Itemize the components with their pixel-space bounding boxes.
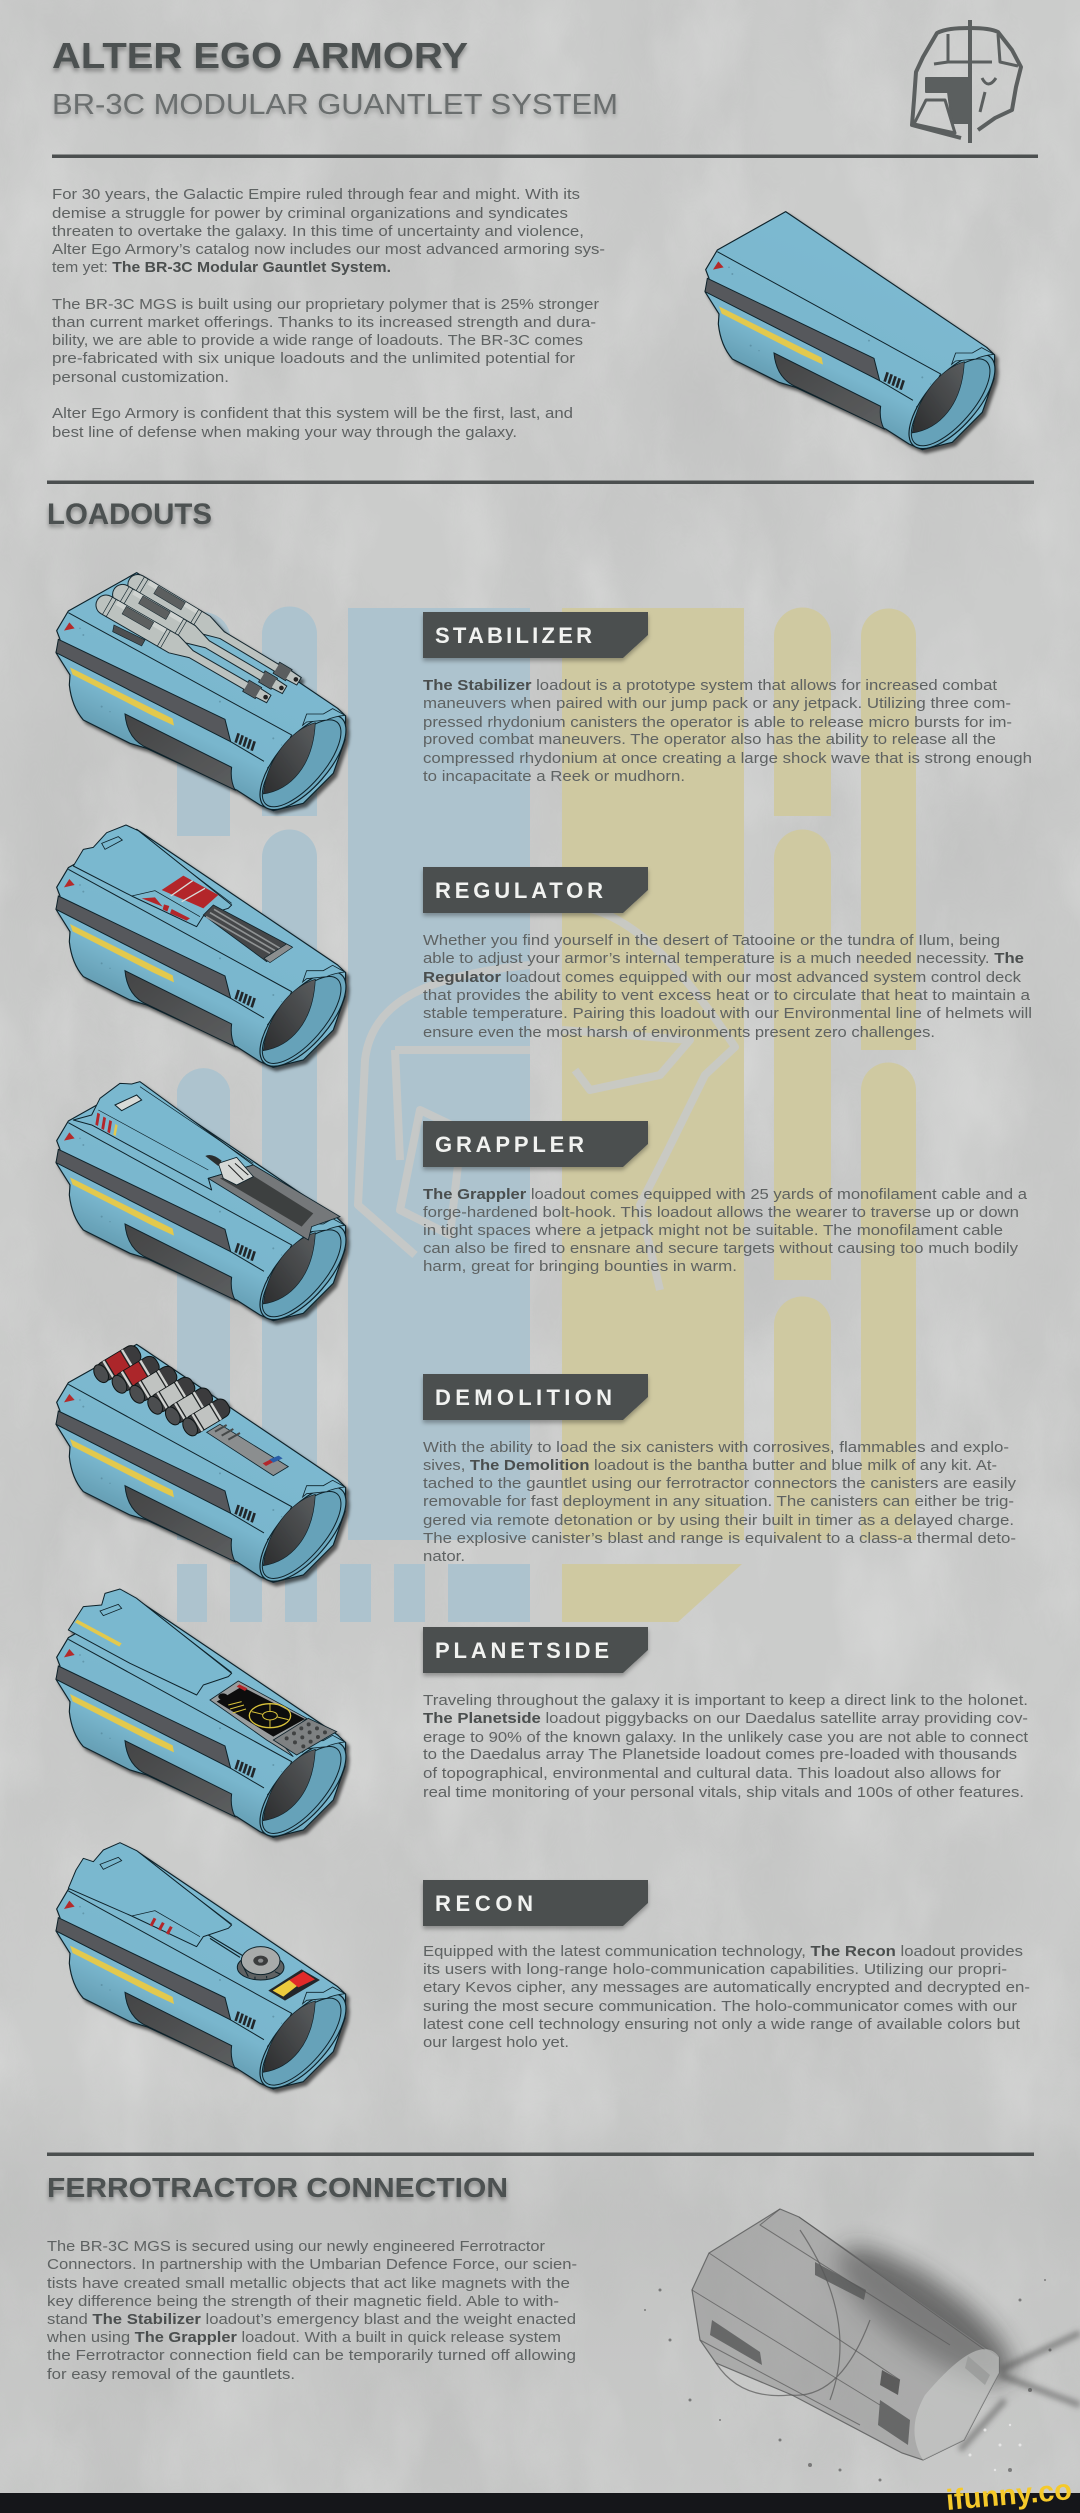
gauntlet: stabilizer with three canisters (56, 571, 361, 823)
label: planetside: PLANETSIDE (435, 1638, 609, 1663)
gauntlet: demolition with six canisters (56, 1343, 361, 1595)
text: regulator (423, 932, 1032, 1041)
label: grappler (423, 1121, 648, 1167)
title: ALTER EGO ARMORY (52, 35, 468, 76)
text: regulator: able to adjust your armor’s internal temperature is a much needed necessity. The (423, 950, 1024, 967)
text: grappler: forge-hardened bolt-hook. This loadout allows the wearer to traverse up or down (423, 1204, 1019, 1221)
intro text block: Alter Ego Armory’s catalog now includes our most advanced armoring sys- (52, 241, 605, 258)
text: stabilizer: pressed rhydonium canisters the operator is able to release micro bursts for im- (423, 714, 1012, 731)
text: regulator: ensure even the most harsh of environments present zero challenges. (423, 1024, 935, 1041)
intro text block: For 30 years, the Galactic Empire ruled through fear and might. With its (52, 186, 580, 203)
intro text block: demise a struggle for power by criminal organizations and syndicates (52, 205, 568, 222)
text: regulator: Whether you find yourself in the desert of Tatooine or the tundra of Ilum, being (423, 932, 1000, 949)
subtitle: BR-3C MODULAR GUANTLET SYSTEM (52, 89, 618, 121)
text: recon: Equipped with the latest communication technology, The Recon loadout provides (423, 1943, 1023, 1960)
heading: loadouts: LOADOUTS (47, 498, 212, 531)
panel: regulator (56, 825, 1032, 1080)
panel: stabilizer (56, 571, 1032, 823)
label: regulator: REGULATOR (435, 878, 603, 903)
icon: split helmet logo (912, 20, 1021, 143)
text: grappler: The Grappler loadout comes equipped with 25 yards of monofilament cable and a (423, 1186, 1028, 1203)
label: demolition (423, 1374, 648, 1420)
text: planetside: real time monitoring of your personal vitals, ship vitals and 100s of other features. (423, 1784, 1024, 1801)
header divider (52, 154, 1038, 158)
label: recon: RECON (435, 1891, 533, 1916)
intro text block: Alter Ego Armory is confident that this system will be the first, last, and (52, 405, 573, 422)
intro text block: than current market offerings. Thanks to its increased strength and dura- (52, 314, 596, 331)
watermark: split helmet of blue and yellow bars (177, 606, 916, 1622)
text: ferrotractor (46, 2238, 577, 2383)
text: demolition (423, 1439, 1017, 1565)
gauntlet: planetside with data screen (56, 1589, 361, 1850)
intro text block (52, 186, 605, 441)
text: ferrotractor: Connectors. In partnership with the Umbarian Defence Force, our scien- (47, 2256, 577, 2273)
gauntlet: regulator with control deck (56, 825, 361, 1080)
label: demolition: DEMOLITION (435, 1385, 612, 1410)
text: recon: its users with long-range holo-communication capabilities. Utilizing our propri- (423, 1961, 1007, 1978)
label: stabilizer (423, 612, 648, 658)
text: grappler (423, 1186, 1028, 1275)
text: planetside: to the Daedalus array The Planetside loadout comes pre-loaded with thousands (423, 1746, 1017, 1763)
intro text block: bility, we are able to provide a wide range of loadouts. The BR-3C comes (52, 332, 583, 349)
text: regulator: Regulator loadout comes equipped with our most advanced system control deck (423, 969, 1022, 986)
text: demolition: sives, The Demolition loadout is the bantha butter and blue milk of any kit. At- (423, 1457, 997, 1474)
gauntlet: recon with holo-communicator (56, 1843, 361, 2102)
text: ferrotractor: The BR-3C MGS is secured using our newly engineered Ferrotractor (47, 2238, 545, 2255)
text: demolition: nator. (423, 1548, 465, 1565)
text: planetside: erage to 90% of the known galaxy. In the unlikely case you are not able to connect (423, 1729, 1029, 1746)
text: stabilizer: proved combat maneuvers. The operator also has the ability to release all the (423, 731, 996, 748)
text: ferrotractor: the Ferrotractor connection field can be temporarily turned off allowing (47, 2347, 576, 2364)
intro text block: threaten to overtake the galaxy. In this time of uncertainty and violence, (52, 223, 584, 240)
text: ferrotractor: tists have created small metallic objects that act like magnets with the (47, 2275, 570, 2292)
text: recon: our largest holo yet. (423, 2034, 569, 2051)
ferrotractor divider (47, 2152, 1034, 2156)
text: ferrotractor: stand The Stabilizer loadout’s emergency blast and the weight enacted (47, 2311, 576, 2328)
panel: recon (56, 1843, 1030, 2102)
text: planetside: The Planetside loadout piggybacks on our Daedalus satellite array providing cov- (423, 1710, 1028, 1727)
text: demolition: gered via remote detonation or by using their built in timer as a delayed charge. (423, 1512, 1014, 1529)
text: recon: latest cone cell technology ensuring not only a wide range of available colors but (423, 2016, 1021, 2033)
text: ferrotractor: when using The Grappler loadout. With a built in quick release system (46, 2329, 561, 2346)
footer bar (0, 2474, 1080, 2513)
label: grappler: GRAPPLER (435, 1132, 584, 1157)
text: demolition: With the ability to load the six canisters with corrosives, flammables and explo- (423, 1439, 1009, 1456)
text: demolition: removable for fast deployment in any situation. The canisters can either be trig- (423, 1493, 1014, 1510)
loadouts divider (47, 480, 1034, 484)
panel: demolition (56, 1343, 1017, 1595)
text: stabilizer: compressed rhydonium at once creating a large shock wave that is strong enough (423, 750, 1032, 767)
text: planetside: Traveling throughout the galaxy it is important to keep a direct link to the holonet. (423, 1692, 1028, 1709)
hero gauntlet (705, 212, 1010, 462)
text: ferrotractor: for easy removal of the gauntlets. (47, 2366, 295, 2383)
text: planetside (423, 1692, 1029, 1801)
intro text block: best line of defense when making your way through the galaxy. (52, 424, 517, 441)
intro text block: The BR-3C MGS is built using our proprietary polymer that is 25% stronger (52, 296, 599, 313)
label: regulator (423, 867, 648, 913)
text: recon: suring the most secure communication. The holo-communicator comes with our (423, 1998, 1017, 2015)
text: grappler: can also be fired to ensnare and secure targets without causing too much bodily (423, 1240, 1019, 1257)
text: ferrotractor: key difference being the strength of their magnetic field. Able to with- (47, 2293, 559, 2310)
intro text block: pre-fabricated with six unique loadouts and the unlimited potential for (52, 350, 575, 367)
text: grappler: in tight spaces where a jetpack might not be suitable. The monofilament cable (423, 1222, 1003, 1239)
text: recon: etary Kevos cipher, any messages are automatically encrypted and decrypted en- (423, 1979, 1030, 1996)
intro text block: personal customization. (52, 369, 229, 386)
gauntlet: grappler with cable rail and hook (56, 1082, 361, 1333)
illustration: ghost gauntlet embedded in cracked wall (644, 2209, 1080, 2482)
label: planetside (423, 1627, 648, 1673)
text: stabilizer (423, 677, 1032, 785)
panel: grappler (56, 1082, 1028, 1333)
text: stabilizer: The Stabilizer loadout is a prototype system that allows for increased combat (423, 677, 998, 694)
label: recon (423, 1880, 648, 1926)
intro text block: tem yet: The BR-3C Modular Gauntlet System. (52, 259, 391, 276)
panel: planetside (56, 1589, 1029, 1850)
text: recon (423, 1943, 1030, 2051)
text: regulator: stable temperature. Pairing this loadout with our Environmental line of helmets will (423, 1005, 1032, 1022)
text: stabilizer: to incapacitate a Reek or mudhorn. (423, 768, 685, 785)
text: regulator: that provides the ability to vent excess heat or to circulate that heat to maintain a (423, 987, 1031, 1004)
text: demolition: The explosive canister’s blast and range is equivalent to a class-a thermal deto- (423, 1530, 1016, 1547)
text: demolition: tached to the gauntlet using our ferrotractor connectors the canisters are easily (423, 1475, 1017, 1492)
text: grappler: harm, great for bringing bounties in warm. (423, 1258, 737, 1275)
label: stabilizer: STABILIZER (435, 623, 592, 648)
heading: ferrotractor connection: FERROTRACTOR CONNECTION (47, 2172, 508, 2203)
text: planetside: of topographical, environmental and cultural data. This loadout also allows for (423, 1765, 1001, 1782)
text: stabilizer: maneuvers when paired with our jump pack or any jetpack. Utilizing three com- (423, 695, 1011, 712)
